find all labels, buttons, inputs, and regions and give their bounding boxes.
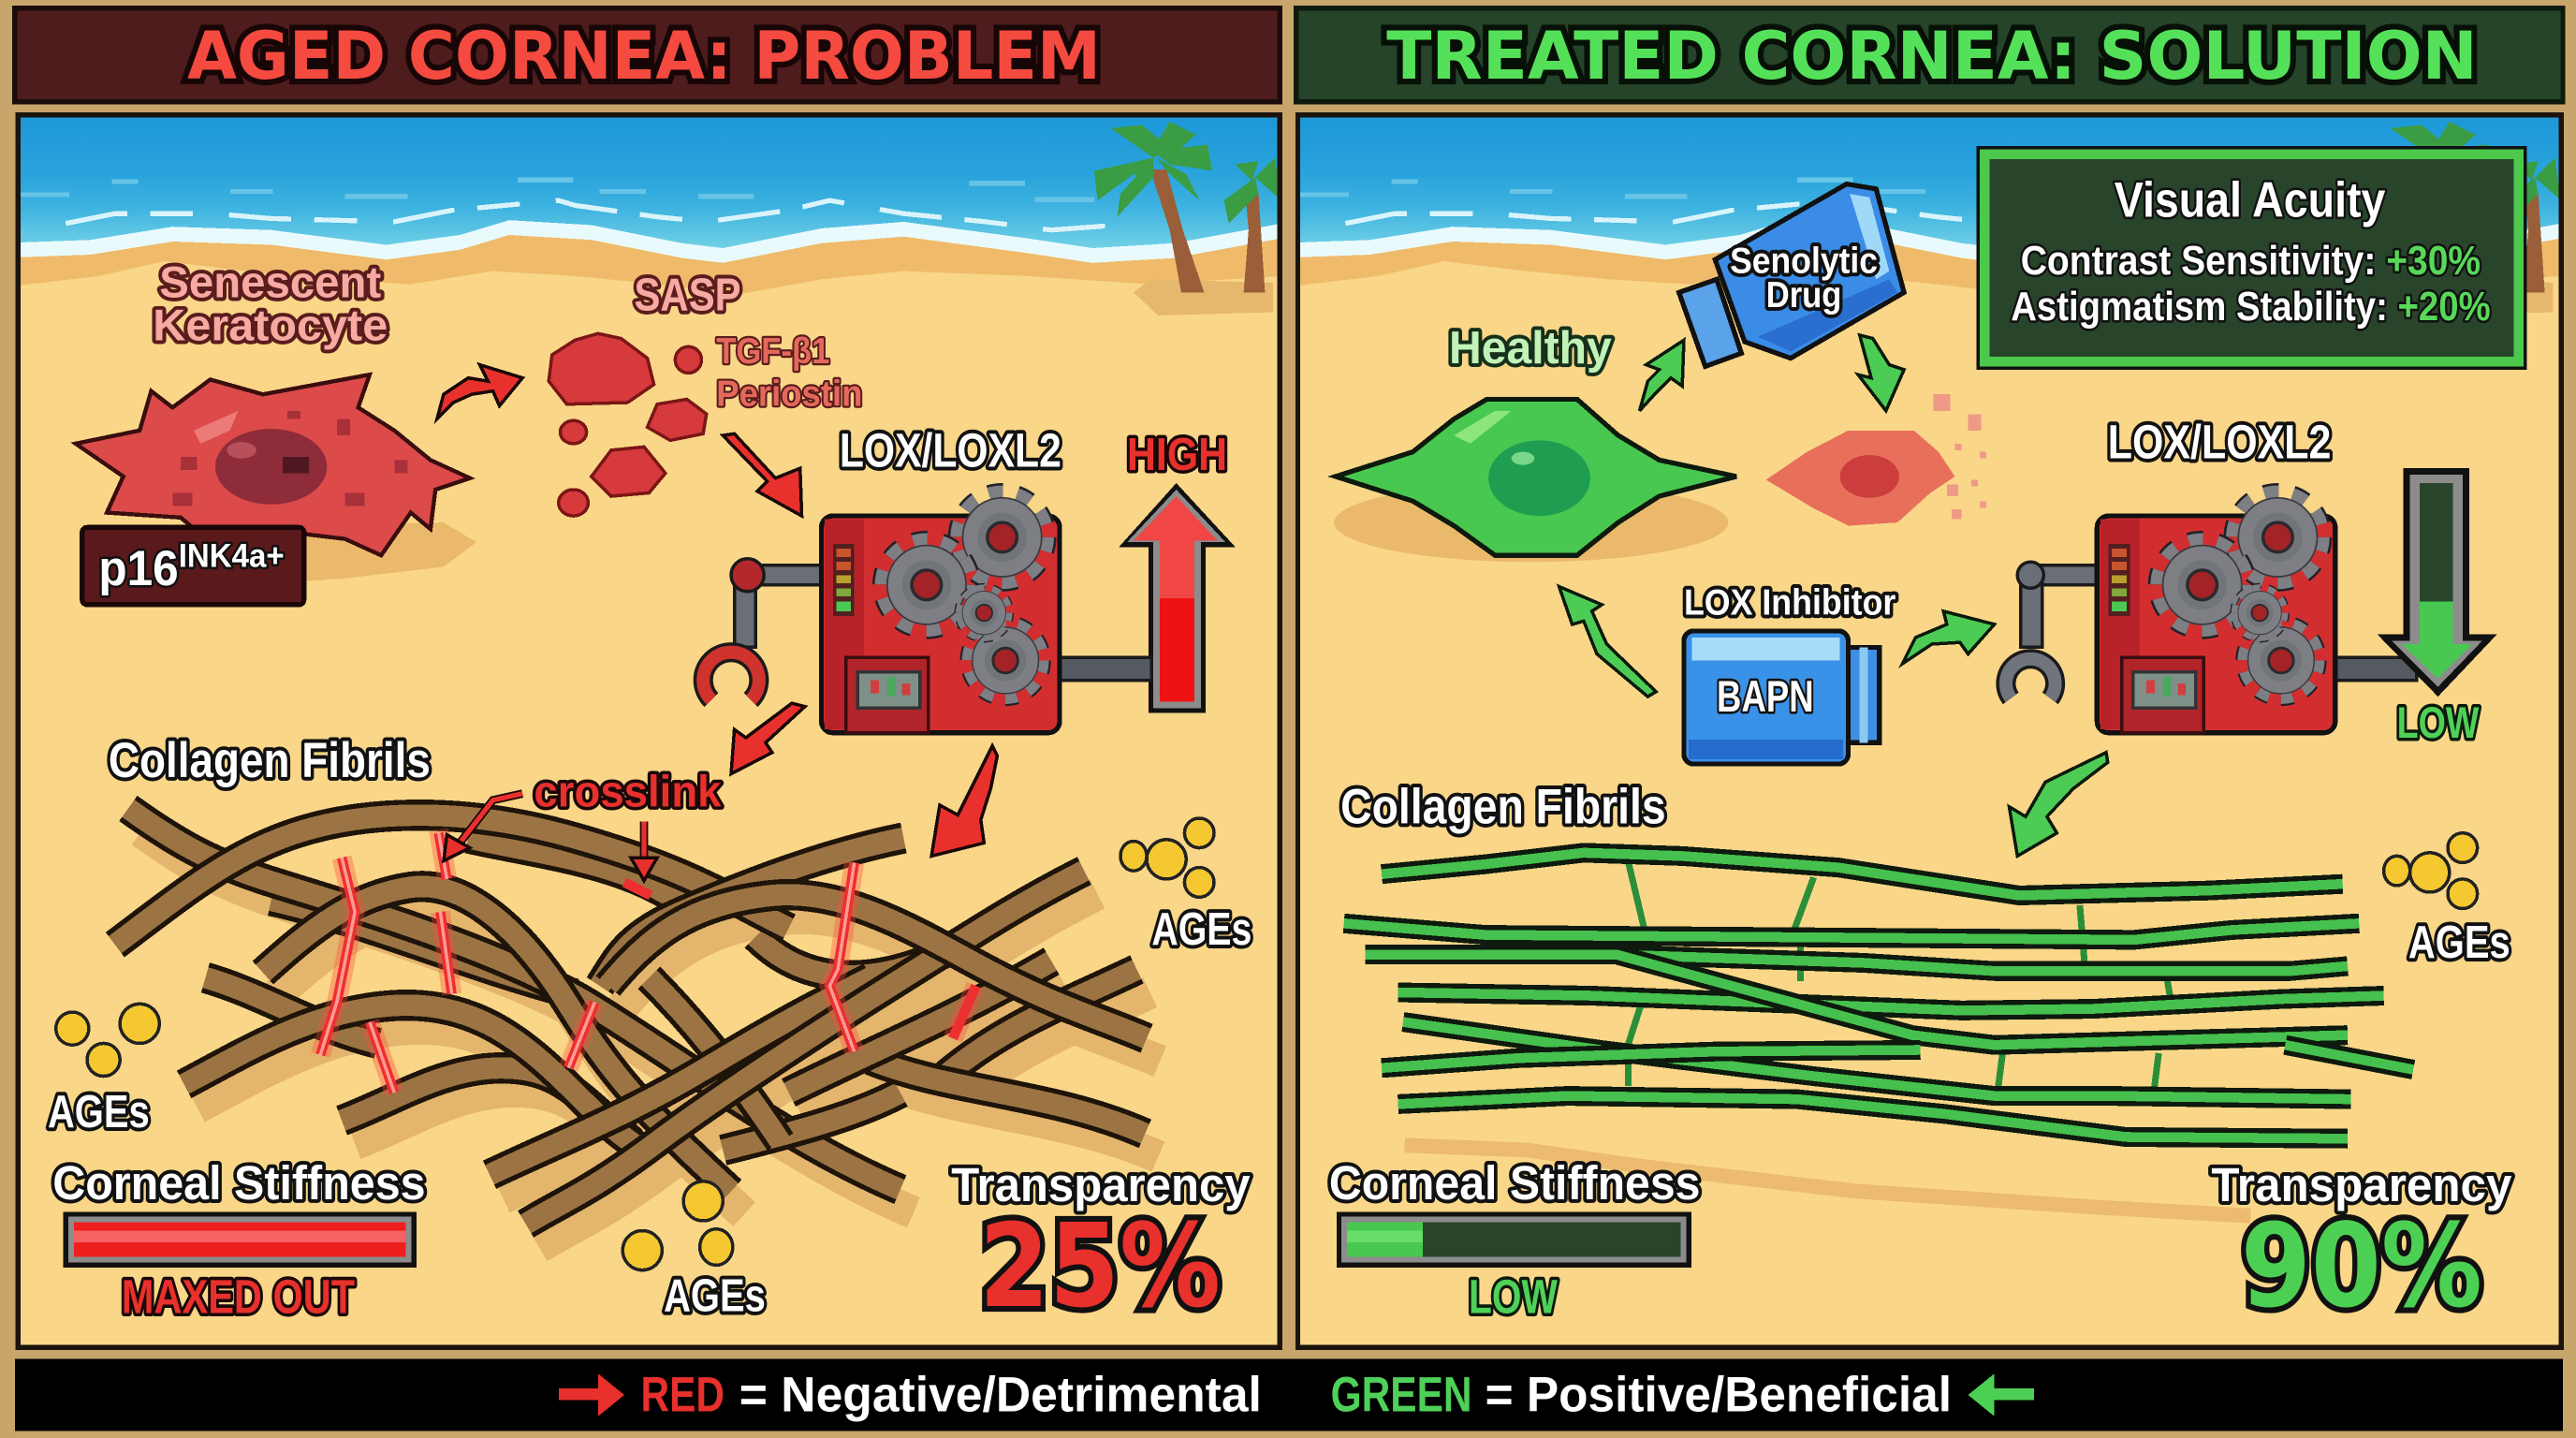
senescent keratocyte label [153, 258, 388, 350]
collagen fibrils label right: Collagen Fibrils [1340, 779, 1666, 834]
transparency readout 25%: Transparency [951, 1158, 1251, 1211]
LOX inhibitor label: LOX Inhibitor [1684, 582, 1895, 623]
senescent keratocyte label: Senescent [159, 258, 381, 308]
arrow: BAPN to machine [1902, 611, 1995, 664]
transparency readout 90%: 90% [2241, 1199, 2482, 1333]
callout: visual acuity: Contrast Sensitivity: +30% [2021, 238, 2481, 284]
LOW label gauge: LOW [2397, 698, 2480, 748]
icon: senolytic drug bottle: Drug [1766, 275, 1841, 315]
arrow: machine to fibrils right [2009, 753, 2108, 856]
icon: SASP particles [549, 333, 707, 516]
badge: p16 INK4a+ [82, 527, 304, 605]
transparency readout 90% [2211, 1158, 2512, 1333]
beach scene background left [0, 117, 1314, 1365]
aligned collagen fibrils [1344, 853, 2413, 1216]
arrow: machine to fibrils [931, 746, 997, 856]
LOX machine left [703, 493, 1151, 733]
legend green text: GREEN [1331, 1368, 1472, 1423]
corneal stiffness gauge left: MAXED OUT [122, 1269, 355, 1323]
corneal stiffness gauge right: LOW [1469, 1269, 1558, 1323]
icon: senescent cell [76, 374, 476, 585]
gauge arrow low [2378, 468, 2497, 697]
legend red text: RED [641, 1368, 724, 1423]
panel border right [1298, 115, 2561, 1347]
AGEs cluster upper right: AGEs [1151, 904, 1251, 955]
badge: p16 INK4a+: INK4a+ [179, 537, 285, 574]
panel: aged cornea problem [0, 8, 1314, 1365]
AGEs cluster bottom: AGEs [664, 1271, 766, 1322]
beach scene background right [1280, 117, 2576, 1365]
HIGH label: HIGH [1127, 430, 1227, 480]
crosslink sparks [320, 829, 976, 1093]
SASP factors text: TGF-β1 [716, 331, 829, 372]
icon: BAPN bottle [1684, 631, 1880, 764]
heading bar: treated cornea: TREATED CORNEA: SOLUTION [1386, 18, 2478, 95]
corneal stiffness gauge right [1329, 1156, 1701, 1323]
callout: visual acuity: Visual Acuity [2115, 173, 2385, 228]
transparency readout 25%: 25% [979, 1199, 1221, 1333]
corneal stiffness gauge right: Corneal Stiffness [1329, 1156, 1701, 1210]
transparency readout 25% [951, 1158, 1251, 1333]
LOX/LOXL2 label left: LOX/LOXL2 [840, 423, 1061, 477]
callout: visual acuity [1978, 148, 2525, 368]
legend red text: = Negative/Detrimental [739, 1368, 1262, 1423]
tangled collagen fibrils [115, 808, 1160, 1247]
SASP factors text: Periostin [716, 374, 862, 414]
LOX/LOXL2 label right: LOX/LOXL2 [2108, 416, 2331, 469]
panel border left [18, 115, 1280, 1347]
transparency readout 90%: Transparency [2211, 1158, 2512, 1211]
AGEs cluster right panel [2384, 833, 2510, 968]
legend green text: = Positive/Beneficial [1486, 1368, 1952, 1423]
AGEs cluster left [48, 1004, 159, 1137]
corneal stiffness gauge left [52, 1156, 426, 1323]
icon: healthy keratocyte [1334, 399, 1736, 562]
callout: visual acuity: Astigmatism Stability: +20% [2011, 284, 2491, 330]
icon: dying senescent cell [1766, 394, 1986, 526]
arrow: drug to senescent [1858, 335, 1904, 411]
arrow: legend red [559, 1373, 624, 1416]
crosslink label: crosslink [534, 768, 722, 817]
LOX machine right [2006, 493, 2417, 733]
SASP factors text [716, 331, 862, 414]
senescent keratocyte label: Keratocyte [153, 301, 388, 350]
arrow: machine to crosslink [731, 703, 805, 774]
panel: treated cornea solution [1280, 8, 2576, 1365]
AGEs cluster right panel: AGEs [2408, 917, 2510, 968]
AGEs cluster left: AGEs [48, 1087, 150, 1137]
icon: BAPN bottle: BAPN [1717, 672, 1814, 722]
SASP label: SASP [634, 271, 741, 321]
corneal stiffness gauge left: Corneal Stiffness [52, 1156, 426, 1210]
healthy label: Healthy [1449, 323, 1612, 374]
collagen fibrils label left: Collagen Fibrils [109, 733, 431, 788]
arrow: BAPN back to healthy [1559, 587, 1656, 697]
icon: senolytic drug bottle: Senolytic [1730, 241, 1878, 281]
heading bar: aged cornea: AGED CORNEA: PROBLEM [187, 18, 1101, 95]
icon: senolytic drug bottle [1679, 184, 1904, 366]
crosslink pointers [444, 794, 657, 881]
badge: p16 INK4a+: p16 [98, 541, 179, 596]
AGEs cluster upper right [1120, 818, 1251, 955]
legend bar [15, 1358, 2563, 1431]
arrow: legend green [1969, 1373, 2034, 1416]
AGEs cluster bottom [622, 1181, 766, 1322]
arrow: cell to SASP [437, 365, 522, 419]
gauge arrow high [1119, 483, 1236, 713]
heading bar: aged cornea [15, 8, 1280, 102]
arrow: SASP to LOX machine [723, 433, 802, 516]
arrow: drug to healthy [1640, 340, 1684, 411]
